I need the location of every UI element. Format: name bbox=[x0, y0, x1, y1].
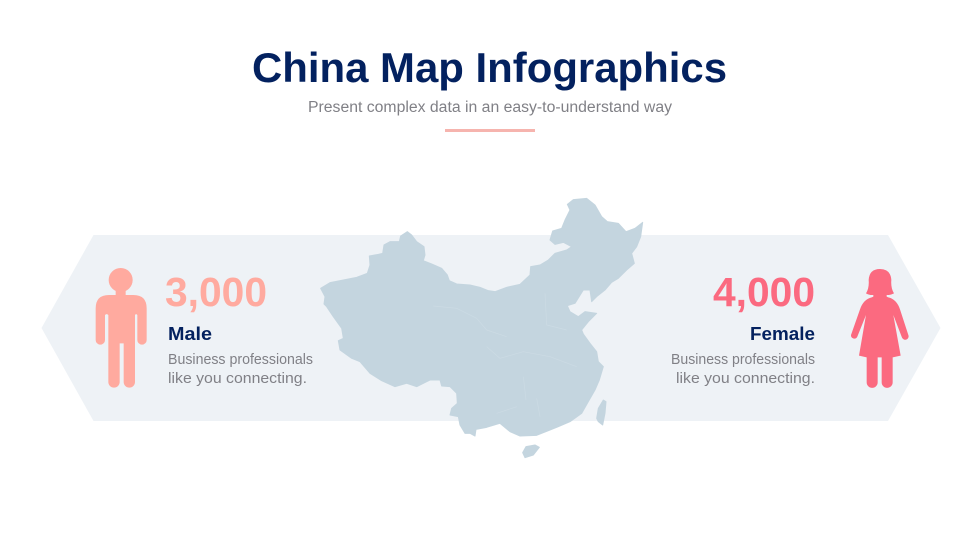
icon: female figure bbox=[851, 269, 909, 388]
province borders bbox=[433, 293, 577, 417]
male label: Male bbox=[168, 324, 212, 344]
male description: like you connecting. bbox=[168, 370, 307, 387]
female label: Female bbox=[750, 324, 815, 344]
Taiwan bbox=[597, 400, 606, 425]
map of China bbox=[321, 198, 643, 458]
panel: female bbox=[671, 269, 909, 388]
male count: 3,000 bbox=[165, 269, 267, 315]
male description: Business professionals bbox=[168, 351, 313, 368]
female count: 4,000 bbox=[713, 269, 815, 315]
title: China Map Infographics bbox=[252, 44, 727, 91]
panel: male bbox=[96, 268, 317, 388]
female description: Business professionals bbox=[671, 351, 815, 368]
subtitle: Present complex data in an easy-to-understand way bbox=[308, 99, 672, 116]
female description: like you connecting. bbox=[676, 370, 815, 387]
accent rule bbox=[445, 129, 535, 132]
mainland bbox=[321, 198, 643, 436]
icon: male figure bbox=[96, 268, 147, 388]
Hainan bbox=[523, 445, 539, 458]
hexagonal banner bbox=[42, 235, 940, 421]
